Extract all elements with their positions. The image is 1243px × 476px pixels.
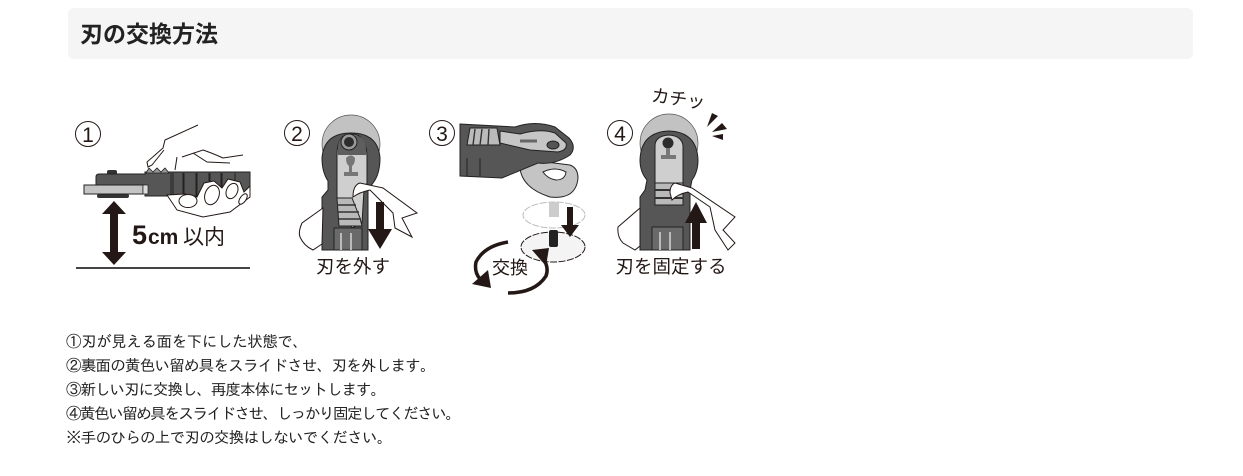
new blade ghost: [523, 202, 585, 228]
disc and tool front view: [640, 114, 698, 250]
click marks: [707, 113, 727, 140]
number 1: 1: [82, 124, 94, 147]
label fix blade: 刃を固定する: [615, 256, 727, 277]
down arrow: [368, 202, 392, 249]
label exchange: 交換: [492, 258, 528, 278]
step 2 illustration: [284, 115, 417, 277]
instructions text: ④黄色い留め具をスライドさせ、しっかり固定してください。: [66, 405, 459, 421]
opened disc: [520, 160, 578, 197]
instructions text: ③新しい刃に交換し、再度本体にセットします。: [66, 381, 385, 397]
slot in disc: [543, 169, 566, 180]
up arrow: [685, 202, 707, 249]
small down arrow: [561, 207, 579, 237]
instructions text: [66, 333, 459, 445]
number 3: 3: [436, 123, 448, 146]
instructions text: ②裏面の黄色い留め具をスライドさせ、刃を外します。: [66, 357, 435, 373]
height arrow: [102, 201, 126, 265]
instructions text: ①刃が見える面を下にした状態で、: [66, 333, 308, 349]
step 3 illustration: [430, 120, 585, 293]
tool body: [460, 124, 573, 178]
number 4: [608, 120, 632, 146]
hands: [618, 183, 735, 250]
number 4: 4: [614, 123, 626, 146]
ground line: [76, 267, 250, 269]
step 4 illustration: [608, 85, 735, 277]
hands: [299, 183, 417, 250]
hand: [147, 125, 250, 217]
new blade: [521, 230, 585, 262]
label remove blade: 刃を外す: [316, 256, 390, 277]
instructions text: ※手のひらの上で刃の交換はしないでください。: [66, 429, 392, 445]
label 5cm: cm: [148, 226, 178, 249]
number 2: [284, 120, 310, 146]
label 5cm: 以内: [183, 226, 225, 249]
disc and tool front view: [322, 115, 380, 250]
step 1 illustration: [76, 122, 250, 269]
label click: カチッ: [650, 85, 706, 113]
title: 刃の交換方法: [80, 21, 218, 47]
heading bar: [68, 8, 1193, 59]
tool side view: [84, 168, 250, 198]
label 5cm: 5: [132, 220, 147, 250]
exchange arrows: [472, 242, 549, 293]
number 3: [430, 120, 454, 146]
number 2: 2: [291, 123, 303, 146]
number 1: [76, 122, 100, 147]
label 5cm: [132, 220, 225, 250]
